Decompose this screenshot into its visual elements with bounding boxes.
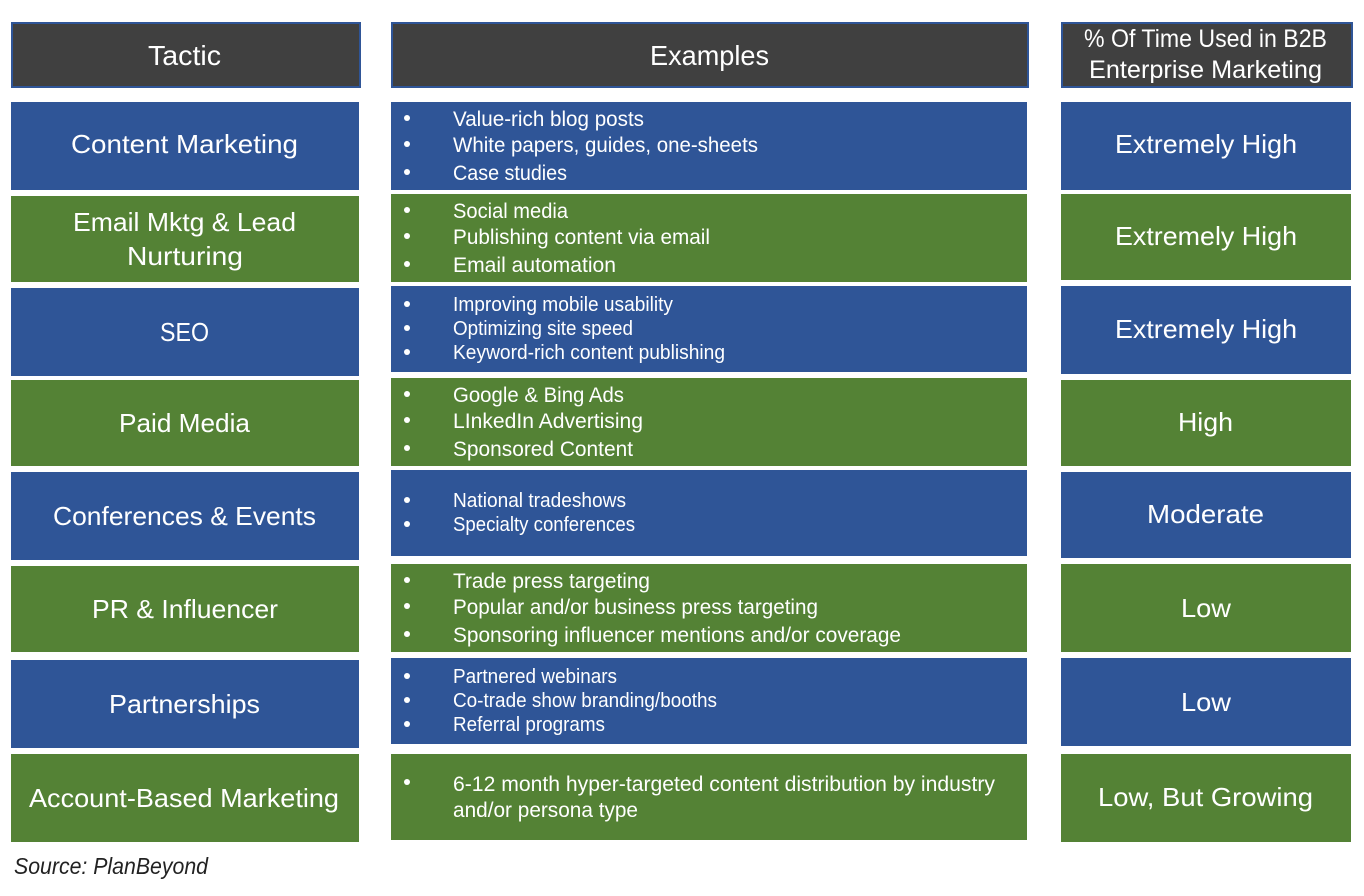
examples: PR and Influencer: Trade press targeting [453, 570, 650, 593]
tactic: Content Marketing: Content Marketing [71, 129, 298, 159]
examples: Conferences and Events: Specialty conferences [453, 514, 635, 536]
tactic: Partnerships [11, 660, 359, 748]
header: percent of time used: Enterprise Marketing [1089, 56, 1322, 84]
table header row [12, 23, 1352, 87]
usage: PR and Influencer [1061, 564, 1351, 652]
tactic: Email Mktg and Lead Nurturing [11, 196, 359, 282]
usage: Email: Extremely High [1115, 221, 1297, 251]
header: Examples: Examples [650, 40, 769, 71]
usage: SEO: Extremely High [1115, 314, 1297, 344]
examples: Account-Based Marketing [391, 754, 1027, 840]
examples: Partnerships [391, 658, 1027, 744]
header: Examples [392, 23, 1028, 87]
examples: Paid Media: LInkedIn Advertising [453, 410, 643, 433]
tactic: Content Marketing [11, 102, 359, 190]
usage: SEO [1061, 286, 1351, 374]
examples: PR and Influencer [391, 564, 1027, 652]
examples: Email: Email automation [453, 254, 616, 277]
usage: Account-Based Marketing [1061, 754, 1351, 842]
tactic: PR and Influencer [11, 566, 359, 652]
header: percent of time used [1062, 23, 1352, 87]
tactic: Conferences and Events: Conferences & Events [53, 501, 316, 531]
examples: Conferences and Events [391, 470, 1027, 556]
tactic: Paid Media [11, 380, 359, 466]
tactic: Account-Based Marketing: Account-Based Marketing [29, 783, 339, 813]
tactic: PR and Influencer: PR & Influencer [92, 594, 278, 624]
usage: Conferences and Events [1061, 472, 1351, 558]
examples: SEO [391, 286, 1027, 372]
usage: Partnerships: Low [1181, 687, 1231, 717]
examples: Account-Based Marketing: 6-12 month hyper-targeted content distribution by industry [453, 773, 995, 796]
usage: Content Marketing [1061, 102, 1351, 190]
examples: Account-Based Marketing: and/or persona type [453, 799, 638, 822]
examples: Email: Publishing content via email [453, 226, 710, 249]
examples: Paid Media: Google & Bing Ads [453, 384, 624, 407]
usage: Partnerships [1061, 658, 1351, 746]
examples: Content Marketing: White papers, guides, one-sheets [453, 134, 758, 157]
usage: Paid Media [1061, 380, 1351, 466]
tactic: Email Mktg and Lead Nurturing: Nurturing [127, 241, 243, 271]
examples: PR and Influencer: Popular and/or business press targeting [453, 596, 818, 619]
usage: Paid Media: High [1178, 407, 1233, 437]
examples: Partnerships: Referral programs [453, 714, 605, 736]
tactic: Partnerships: Partnerships [109, 689, 260, 719]
header: Tactic [12, 23, 360, 87]
usage: Account-Based Marketing: Low, But Growing [1098, 782, 1313, 812]
tactic: SEO: SEO [160, 317, 209, 347]
tactic: Account-Based Marketing [11, 754, 359, 842]
usage: PR and Influencer: Low [1181, 593, 1231, 623]
header: percent of time used: % Of Time Used in B2B [1084, 25, 1327, 53]
tactic: Conferences and Events [11, 472, 359, 560]
examples: Email [391, 194, 1027, 282]
examples: SEO: Optimizing site speed [453, 318, 633, 340]
header: Tactic: Tactic [148, 40, 221, 71]
examples: SEO: Keyword-rich content publishing [453, 342, 725, 364]
examples: Conferences and Events: National tradeshows [453, 490, 626, 512]
usage: Email [1061, 194, 1351, 280]
column: percent of time used [1061, 102, 1351, 842]
column: Examples [391, 102, 1027, 840]
usage: Content Marketing: Extremely High [1115, 129, 1297, 159]
examples: PR and Influencer: Sponsoring influencer mentions and/or coverage [453, 624, 901, 647]
column: Tactic [11, 102, 359, 842]
examples: Content Marketing: Value-rich blog posts [453, 108, 644, 131]
examples: Email: Social media [453, 200, 568, 223]
tactic: Paid Media: Paid Media [119, 408, 251, 438]
examples: Content Marketing: Case studies [453, 162, 567, 185]
source note: Source: PlanBeyond [14, 853, 209, 879]
usage: Conferences and Events: Moderate [1147, 499, 1264, 529]
examples: Partnerships: Co-trade show branding/booths [453, 690, 717, 712]
examples: Content Marketing [391, 102, 1027, 190]
tactic: Email Mktg and Lead Nurturing: Email Mktg & Lead [73, 207, 296, 237]
examples: Paid Media [391, 378, 1027, 466]
examples: Partnerships: Partnered webinars [453, 666, 617, 688]
tactic: SEO [11, 288, 359, 376]
examples: SEO: Improving mobile usability [453, 294, 673, 316]
examples: Paid Media: Sponsored Content [453, 438, 633, 461]
